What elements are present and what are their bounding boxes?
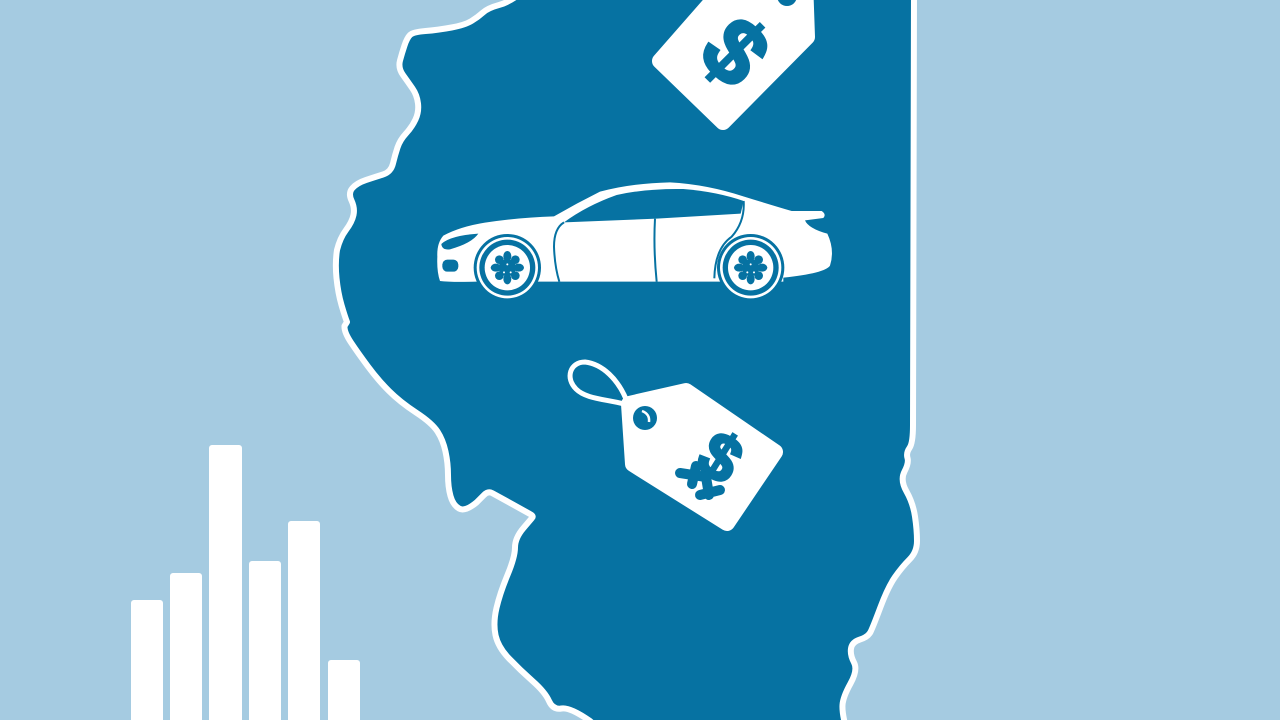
dollar glyph crossbar [680,466,720,495]
car body [437,182,832,282]
map: Illinois state outline [336,0,917,720]
car window [564,189,744,222]
icon: tag hole top [777,0,797,6]
tag body [629,391,775,523]
headlight [441,234,478,249]
bar chart [131,445,360,720]
front vent [442,260,458,272]
icon: price tag bottom [570,362,775,523]
dollar sign bottom: $ [685,416,756,498]
icon: car [437,182,832,301]
front wheel [474,234,541,301]
door lines [554,201,744,282]
icon: price tag top [660,0,807,122]
dollar sign top: $ [681,0,789,106]
tag string [570,362,626,404]
rear wheel [717,234,784,301]
tag hole [633,406,657,430]
